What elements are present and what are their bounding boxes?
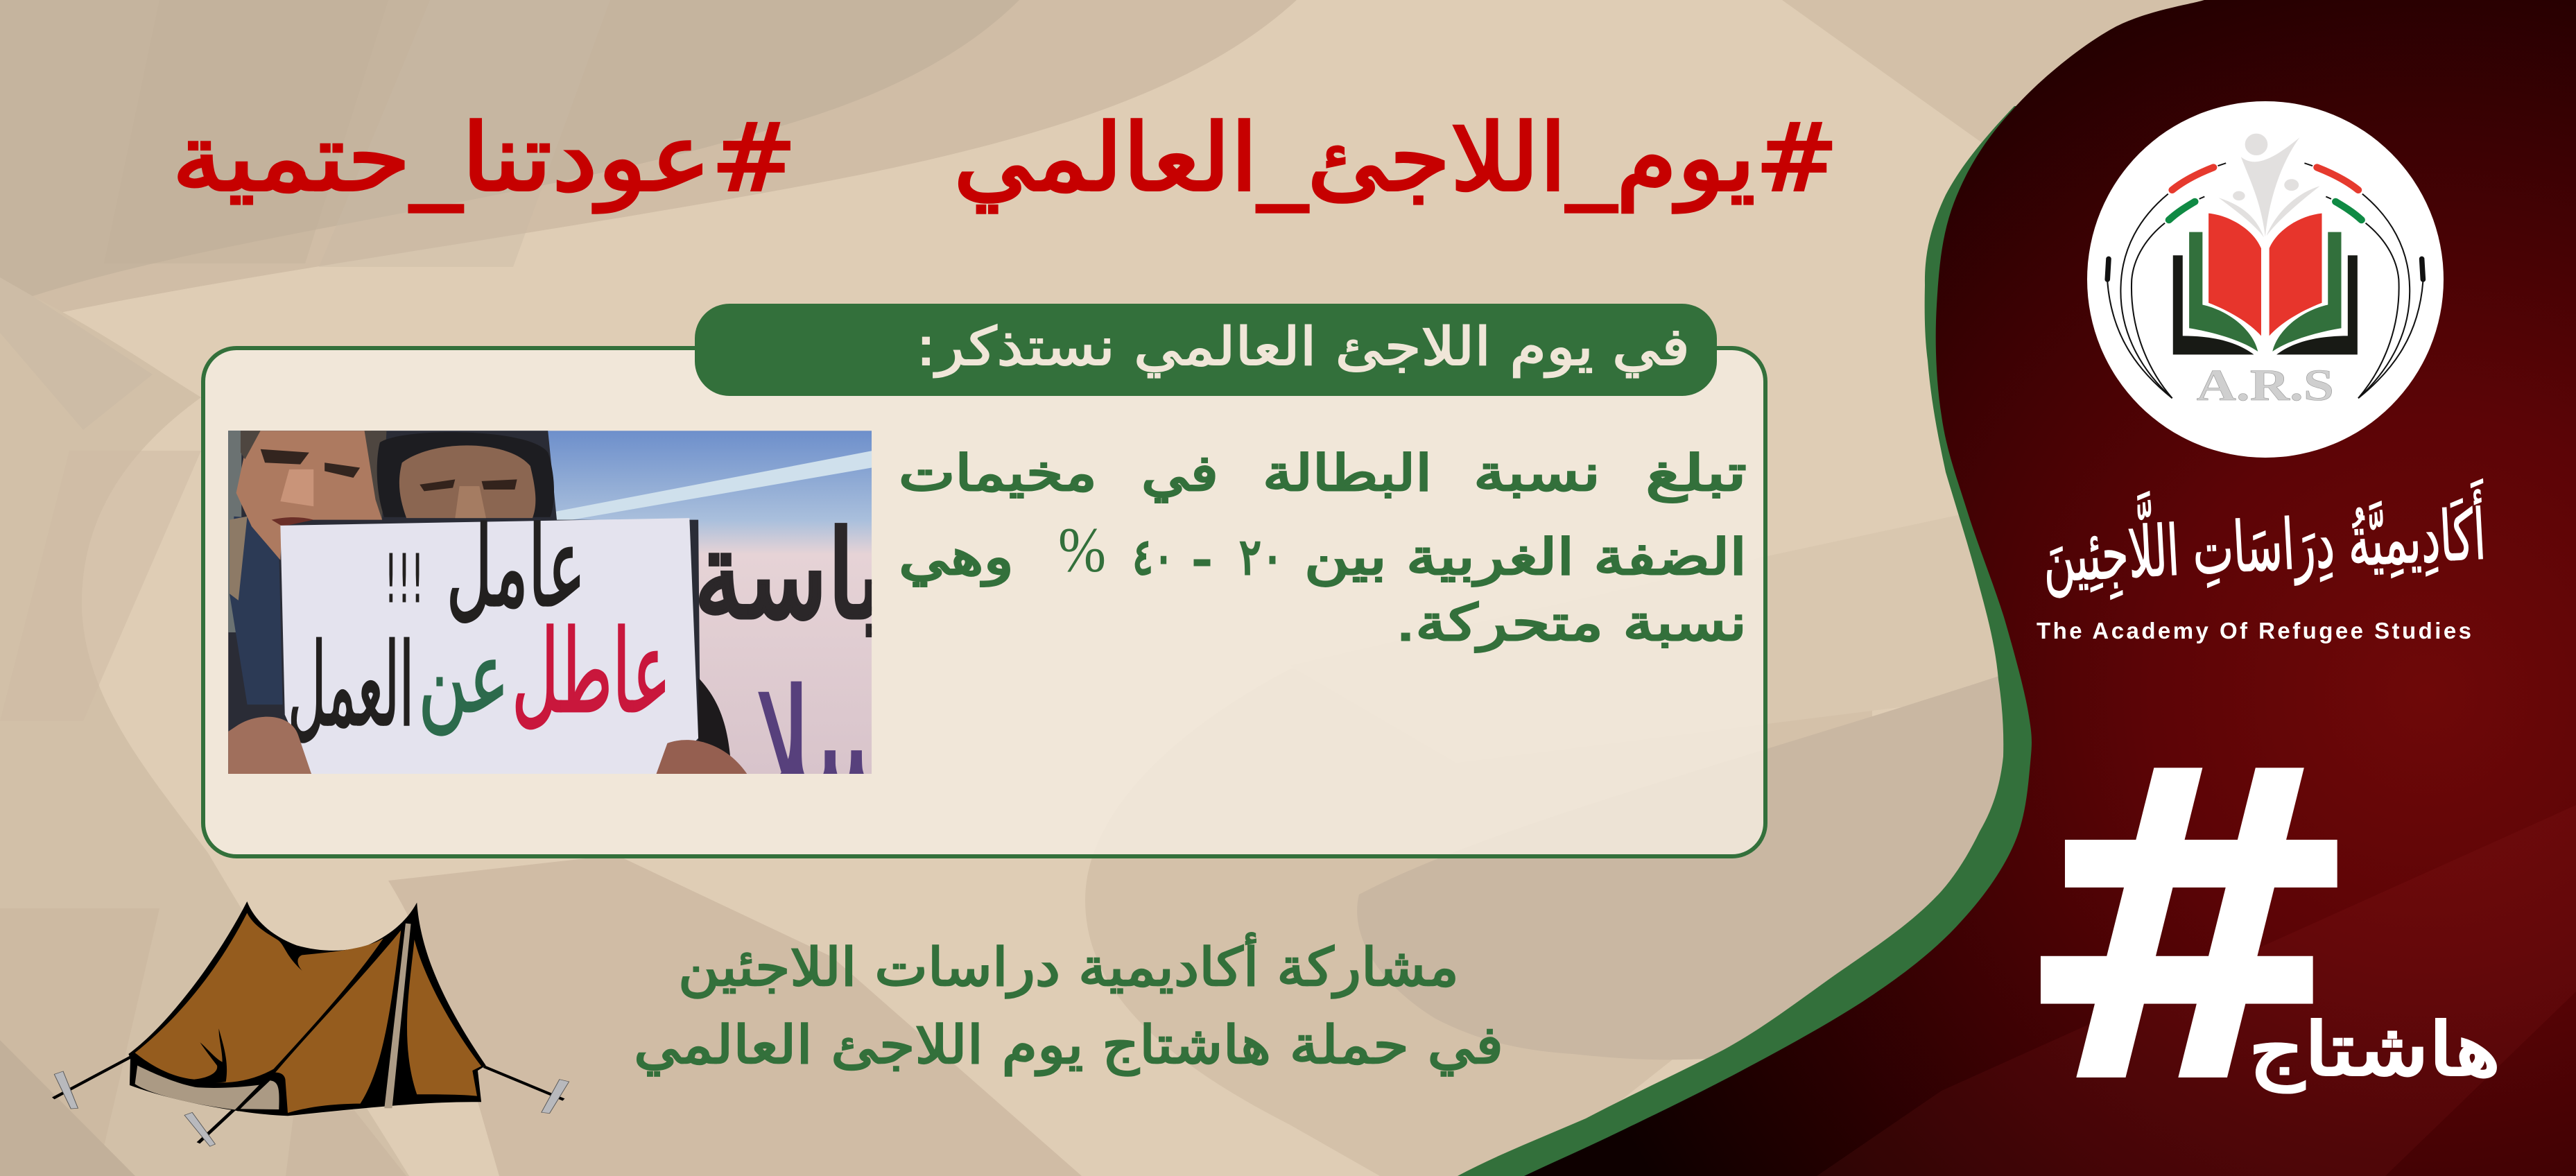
logo: reeds (2107, 163, 2423, 398)
body text (899, 444, 1747, 652)
card heading tab: في يوم اللاجئ العالمي نستذكر: (916, 315, 1690, 378)
logo: open book (2173, 214, 2358, 354)
card heading tab (695, 304, 1717, 396)
logo text: English name: The Academy Of Refugee Studies (2037, 618, 2471, 643)
panel: green curve band (1458, 106, 2576, 1176)
footer text: academy participation (634, 933, 1503, 1076)
photo: protest placard: باسة (694, 505, 884, 646)
body text: مخيمات (899, 444, 1097, 502)
photo: protest placard: عامل (447, 503, 585, 632)
body text: البطالة (1263, 444, 1432, 502)
photo: protest placard (228, 431, 872, 774)
photo: protest placard: عن (418, 621, 509, 735)
title: hashtag refugee day: #يوم_اللاجئ_العالمي (953, 104, 1838, 213)
logo: A.R.S letters: A.R.S (2197, 361, 2334, 410)
logo: academy emblem (2087, 101, 2444, 458)
icon: tent (53, 901, 569, 1146)
body text: نسبة (1473, 444, 1600, 502)
body text: ٤٠ (1132, 528, 1174, 586)
panel: fact card (203, 304, 1765, 856)
title: hashtag our return is inevitable: #عودتنا_حتمية (172, 104, 797, 213)
footer text: academy participation: في حملة هاشتاج يوم اللاجئ العالمي (634, 1014, 1503, 1076)
body text: في (1141, 444, 1218, 503)
icon: large hash symbol (2041, 768, 2337, 1078)
panel: dark red side (1524, 0, 2576, 1176)
panel: fact card: سلا (756, 658, 893, 831)
photo: protest placard: !!! (384, 540, 424, 618)
body text: % (1058, 514, 1106, 585)
label: hashtag word: هاشتاج (2249, 1008, 2500, 1093)
body text: تبلغ (1645, 444, 1747, 503)
body text: وهي (899, 528, 1014, 587)
body text: نسبة متحركة. (1396, 594, 1747, 652)
body text: الضفة الغربية بين (1304, 528, 1747, 587)
logo: people figures (2219, 134, 2320, 237)
footer text: academy participation: مشاركة أكاديمية دراسات اللاجئين (678, 933, 1459, 998)
body text: ٢٠ (1239, 528, 1283, 586)
photo: protest placard: عاطل (512, 606, 671, 738)
photo: protest placard: العمل (288, 619, 414, 752)
